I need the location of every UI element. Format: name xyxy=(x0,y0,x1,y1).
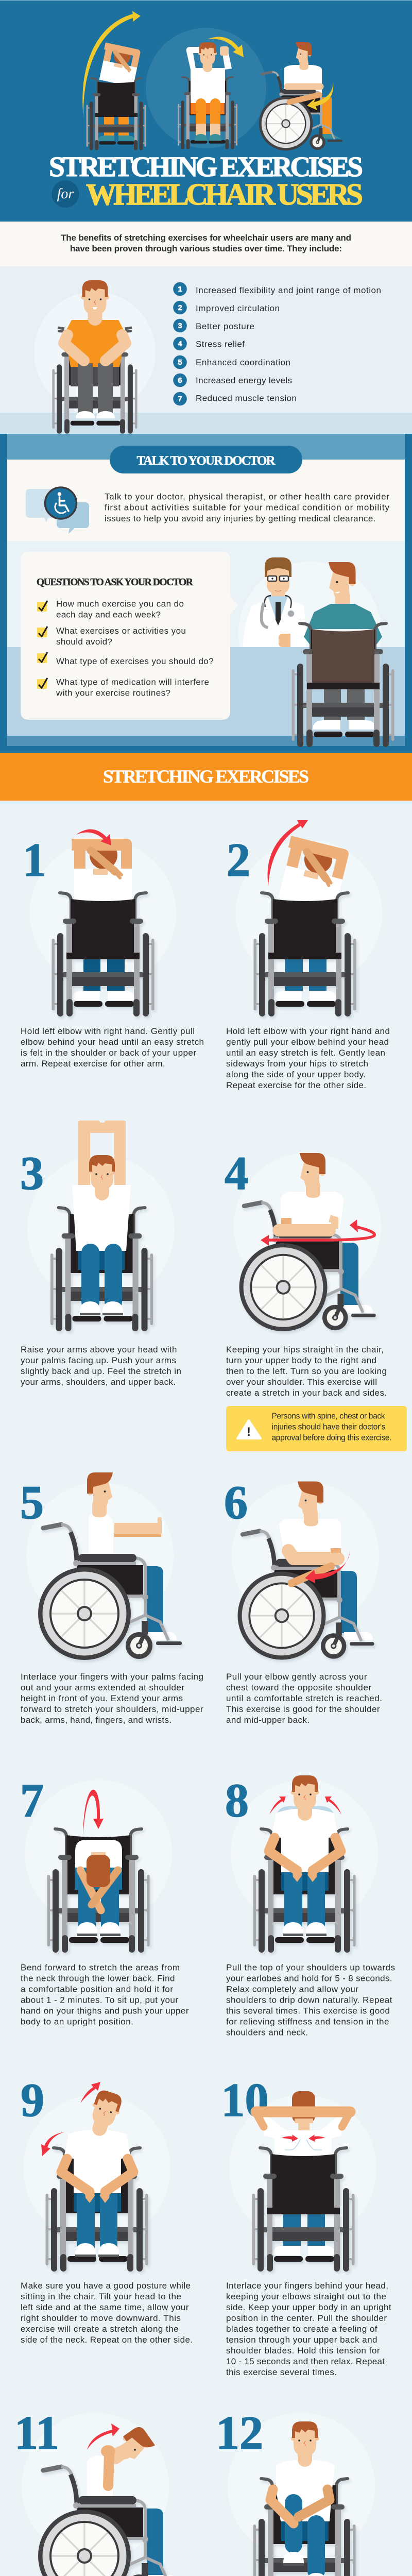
text xyxy=(226,1963,395,2037)
benefit list: 6 xyxy=(178,376,182,385)
text: sitting in the chair. Tilt your head to the xyxy=(21,2292,181,2301)
figure: elbow pull from behind xyxy=(52,839,154,1016)
figure: arms raised xyxy=(50,1121,153,1331)
number 2: 2 xyxy=(227,834,250,886)
question text xyxy=(56,599,214,698)
benefit list: 7 xyxy=(178,395,182,403)
exercise 8 xyxy=(225,1774,395,2037)
text: shoulder blades. Hold this tension for xyxy=(226,2346,380,2355)
text: Hold left elbow with your right hand and xyxy=(226,1026,390,1036)
exercise 1 xyxy=(21,829,204,1069)
benefit list xyxy=(173,282,381,405)
callout: warning: approval before doing this exercise. xyxy=(272,1433,391,1443)
badge: for: for xyxy=(57,186,74,202)
figure: head pulled forward xyxy=(38,2424,182,2576)
question text: What exercises or activities you xyxy=(56,626,186,636)
text xyxy=(21,1345,181,1387)
doctor advice text xyxy=(105,492,389,523)
arrows: red shoulders up xyxy=(269,1797,341,1815)
text: chest toward the opposite shoulder xyxy=(226,1683,371,1692)
arrow: red xyxy=(305,1551,350,1583)
text: until a comfortable stretch is reached. xyxy=(226,1693,382,1703)
card: questions to ask your doctor xyxy=(21,552,238,720)
text xyxy=(226,2281,391,2377)
benefit list: 5 xyxy=(178,358,182,367)
number 4: 4 xyxy=(225,1147,248,1199)
card: questions to ask your doctor: QUESTIONS TO ASK YOUR DOCTOR xyxy=(37,577,194,588)
text: over your shoulder. This exercise will xyxy=(226,1377,377,1387)
arrow: red xyxy=(268,820,308,886)
exercise 5 xyxy=(20,1472,203,1725)
text: for relieving stiffness and tension in the xyxy=(226,2016,389,2027)
text: Bend forward to stretch the areas from xyxy=(21,1963,180,1972)
number 12: 12 xyxy=(216,2406,263,2459)
text: Repeat exercise for the other side. xyxy=(226,1080,366,1090)
text: a comfortable position and hold it for xyxy=(21,1985,173,1994)
text: Raise your arms above your head with xyxy=(21,1345,177,1354)
text: this several times. This exercise is good xyxy=(226,2006,390,2015)
text: along the side of your upper body. xyxy=(226,1070,366,1079)
panel: intro text: The benefits of stretching exercises for wheelchair users are many and xyxy=(61,233,351,243)
heading pill: TALK TO YOUR DOCTOR xyxy=(137,454,276,468)
text: right shoulder to move downward. This xyxy=(21,2313,181,2323)
text: exercise will create a stretch along the xyxy=(21,2324,179,2334)
figure: side twist xyxy=(239,1153,376,1331)
figure: front view arms behind head xyxy=(178,42,237,149)
text: your palms facing up. Push your arms xyxy=(21,1355,176,1365)
callout: warning: injuries should have their doctor's xyxy=(272,1423,386,1431)
doctor advice text: Talk to your doctor, physical therapist, or other health care provider xyxy=(105,492,389,502)
figure: arms forward xyxy=(38,1472,182,1660)
text: create a stretch in your back and sides. xyxy=(226,1388,387,1398)
text: your arms, shoulders, and upper back. xyxy=(21,1377,176,1387)
text xyxy=(226,1345,387,1398)
text: elbow behind your head until an easy stretch xyxy=(21,1037,204,1047)
icon: wheelchair in speech bubbles xyxy=(26,487,89,534)
benefit list: Better posture xyxy=(196,321,254,331)
arrow: red twist xyxy=(261,1219,374,1246)
text: Make sure you have a good posture while xyxy=(21,2281,191,2291)
text xyxy=(21,1963,189,2027)
text: then to the left. Turn so you are looking xyxy=(226,1366,387,1376)
text: Interlace your fingers behind your head, xyxy=(226,2281,388,2291)
question text: with your exercise routines? xyxy=(56,688,170,698)
banner: stretching exercises: STRETCHING EXERCISES xyxy=(103,766,309,787)
figure: elbow across chest xyxy=(238,1482,374,1660)
text: left side and at the same time, allow your xyxy=(21,2302,189,2312)
text xyxy=(226,1672,382,1725)
figure: side lean from behind xyxy=(253,836,356,1016)
text: Pull your elbow gently across your xyxy=(226,1672,367,1682)
number 7: 7 xyxy=(20,1774,44,1827)
text: and mid-upper back. xyxy=(226,1715,310,1725)
text: your earlobes and hold for 5 - 8 seconds. xyxy=(226,1973,392,1984)
text: until an easy stretch is felt. Gently lean xyxy=(226,1048,385,1058)
title: wheelchair users: WHEELCHAIR USERS xyxy=(86,177,363,211)
text: slightly back and up. Feel the stretch in xyxy=(21,1366,181,1376)
text xyxy=(21,1672,203,1725)
number 3: 3 xyxy=(20,1147,44,1199)
text: turn your upper body to the right and xyxy=(226,1355,376,1365)
exercise 11 xyxy=(14,2406,204,2576)
text: forward to stretch your shoulders, mid-upper xyxy=(21,1704,203,1714)
figure: shoulder shrug xyxy=(253,1775,355,1953)
arrow: yellow curved head xyxy=(208,37,244,57)
arrows: red tilt xyxy=(41,2082,100,2156)
number 1: 1 xyxy=(23,834,46,886)
text: blades together to create a feeling of xyxy=(226,2324,377,2334)
banner: stretching exercises xyxy=(0,753,412,801)
heading pill xyxy=(110,446,302,473)
text xyxy=(226,1026,390,1090)
arrow: red xyxy=(76,829,111,845)
number 10: 10 xyxy=(221,2074,269,2126)
arrow: red over head xyxy=(83,1790,104,1837)
text: the neck through the lower back. Find xyxy=(21,1973,175,1984)
text: hand on your thighs and push your upper xyxy=(21,2006,189,2015)
benefit list: Increased flexibility and joint range of motion xyxy=(196,285,381,295)
arrow: red xyxy=(87,2424,119,2450)
arrow: yellow sweep left figure xyxy=(82,11,141,117)
benefit list: Enhanced coordination xyxy=(196,358,290,367)
text: Hold left elbow with right hand. Gently pull xyxy=(21,1026,195,1036)
text: back, arms, hand, fingers, and wrists. xyxy=(21,1715,171,1725)
benefit list: 2 xyxy=(178,303,182,312)
text: position in the center. Pull the shoulder xyxy=(226,2313,387,2323)
text: side. Keep your upper body in an upright xyxy=(226,2302,391,2312)
benefit list: Reduced muscle tension xyxy=(196,394,297,403)
text: height in front of you. Extend your arms xyxy=(21,1693,183,1703)
benefit list: 3 xyxy=(178,321,182,330)
figure: hands behind head from behind xyxy=(252,2091,354,2272)
text: side of the neck. Repeat on the other side. xyxy=(21,2335,193,2345)
exercise 12 xyxy=(216,2406,388,2576)
exercise 2 xyxy=(226,820,390,1090)
panel: intro text xyxy=(0,222,412,266)
panel: benefits xyxy=(0,266,412,434)
exercise 7 xyxy=(20,1774,189,2027)
arrows: red blades xyxy=(281,2134,325,2142)
number 11: 11 xyxy=(14,2406,59,2459)
text: 10 - 15 seconds and then relax. Repeat xyxy=(226,2357,385,2366)
title: stretching exercises: STRETCHING EXERCISES xyxy=(49,151,363,182)
number 9: 9 xyxy=(21,2074,44,2126)
benefit list: Stress relief xyxy=(196,339,245,349)
benefit list: Improved circulation xyxy=(196,303,280,313)
question text: What type of medication will interfere xyxy=(56,677,209,687)
callout: warning: Persons with spine, chest or back xyxy=(272,1412,385,1421)
panel: intro text: have been proven through various studies over time. They include: xyxy=(70,244,342,253)
text: about 1 - 2 minutes. To sit up, put your xyxy=(21,1995,178,2005)
question text: should avoid? xyxy=(56,637,112,647)
number 6: 6 xyxy=(224,1476,248,1529)
badge: for xyxy=(52,180,79,208)
figure: head tilt xyxy=(45,2088,148,2272)
arrow: yellow twist xyxy=(307,83,333,110)
number 8: 8 xyxy=(225,1774,249,1827)
question text: How much exercise you can do xyxy=(56,599,184,609)
exercise 9 xyxy=(21,2074,193,2345)
figure: bending forward xyxy=(47,1829,149,1953)
callout: warning xyxy=(226,1406,407,1451)
text: shoulders and neck. xyxy=(226,2028,308,2037)
exercise 4 xyxy=(225,1147,407,1451)
figure: back view stretching xyxy=(87,43,146,150)
exercise 10 xyxy=(221,2074,391,2377)
doctor advice text: issues to help you avoid any injuries by getting medical clearance. xyxy=(105,514,376,523)
panel: hero header xyxy=(0,0,412,222)
panel: talk to your doctor xyxy=(0,434,412,753)
text: Pull the top of your shoulders up towards xyxy=(226,1963,395,1972)
text: this exercise several times. xyxy=(226,2367,337,2377)
text: keeping your elbows straight out to the xyxy=(226,2292,386,2301)
figure: knee to chest xyxy=(253,2421,355,2576)
callout: warning: ! xyxy=(247,1425,251,1439)
text: Relax completely and allow your xyxy=(226,1985,358,1994)
figure: doctor xyxy=(243,557,306,647)
exercise 6 xyxy=(224,1476,382,1725)
doctor advice text: first about activities suitable for your medical condition or mobility xyxy=(105,503,389,512)
figure: smiling man in wheelchair xyxy=(52,280,138,434)
text: Interlace your fingers with your palms facing xyxy=(21,1672,203,1682)
benefit list: 4 xyxy=(178,340,182,348)
text: shoulders to drip down naturally. Repeat xyxy=(226,1995,392,2005)
number 5: 5 xyxy=(20,1476,44,1529)
text: out and your arms extended at shoulder xyxy=(21,1683,184,1692)
figure: patient in wheelchair from behind xyxy=(291,562,394,747)
benefit list: Increased energy levels xyxy=(196,376,292,385)
text: tension through your upper back and xyxy=(226,2335,377,2345)
question checkboxes xyxy=(37,601,47,689)
text: is felt in the shoulder or back of your upper xyxy=(21,1048,196,1058)
benefit list: 1 xyxy=(178,285,182,294)
text: sideways from your hips to stretch xyxy=(226,1059,368,1069)
text: This exercise is good for the shoulder xyxy=(226,1704,380,1714)
question text: each day and each week? xyxy=(56,610,161,619)
text: Keeping your hips straight in the chair, xyxy=(226,1345,384,1354)
text xyxy=(21,2281,193,2345)
text: body to an upright position. xyxy=(21,2016,133,2027)
figure: side view twist xyxy=(259,42,342,150)
text: gently pull your elbow behind your head xyxy=(226,1037,389,1047)
text xyxy=(21,1026,204,1069)
question text: What type of exercises you should do? xyxy=(56,656,214,666)
text: arm. Repeat exercise for other arm. xyxy=(21,1059,165,1069)
exercise 3 xyxy=(20,1121,181,1387)
